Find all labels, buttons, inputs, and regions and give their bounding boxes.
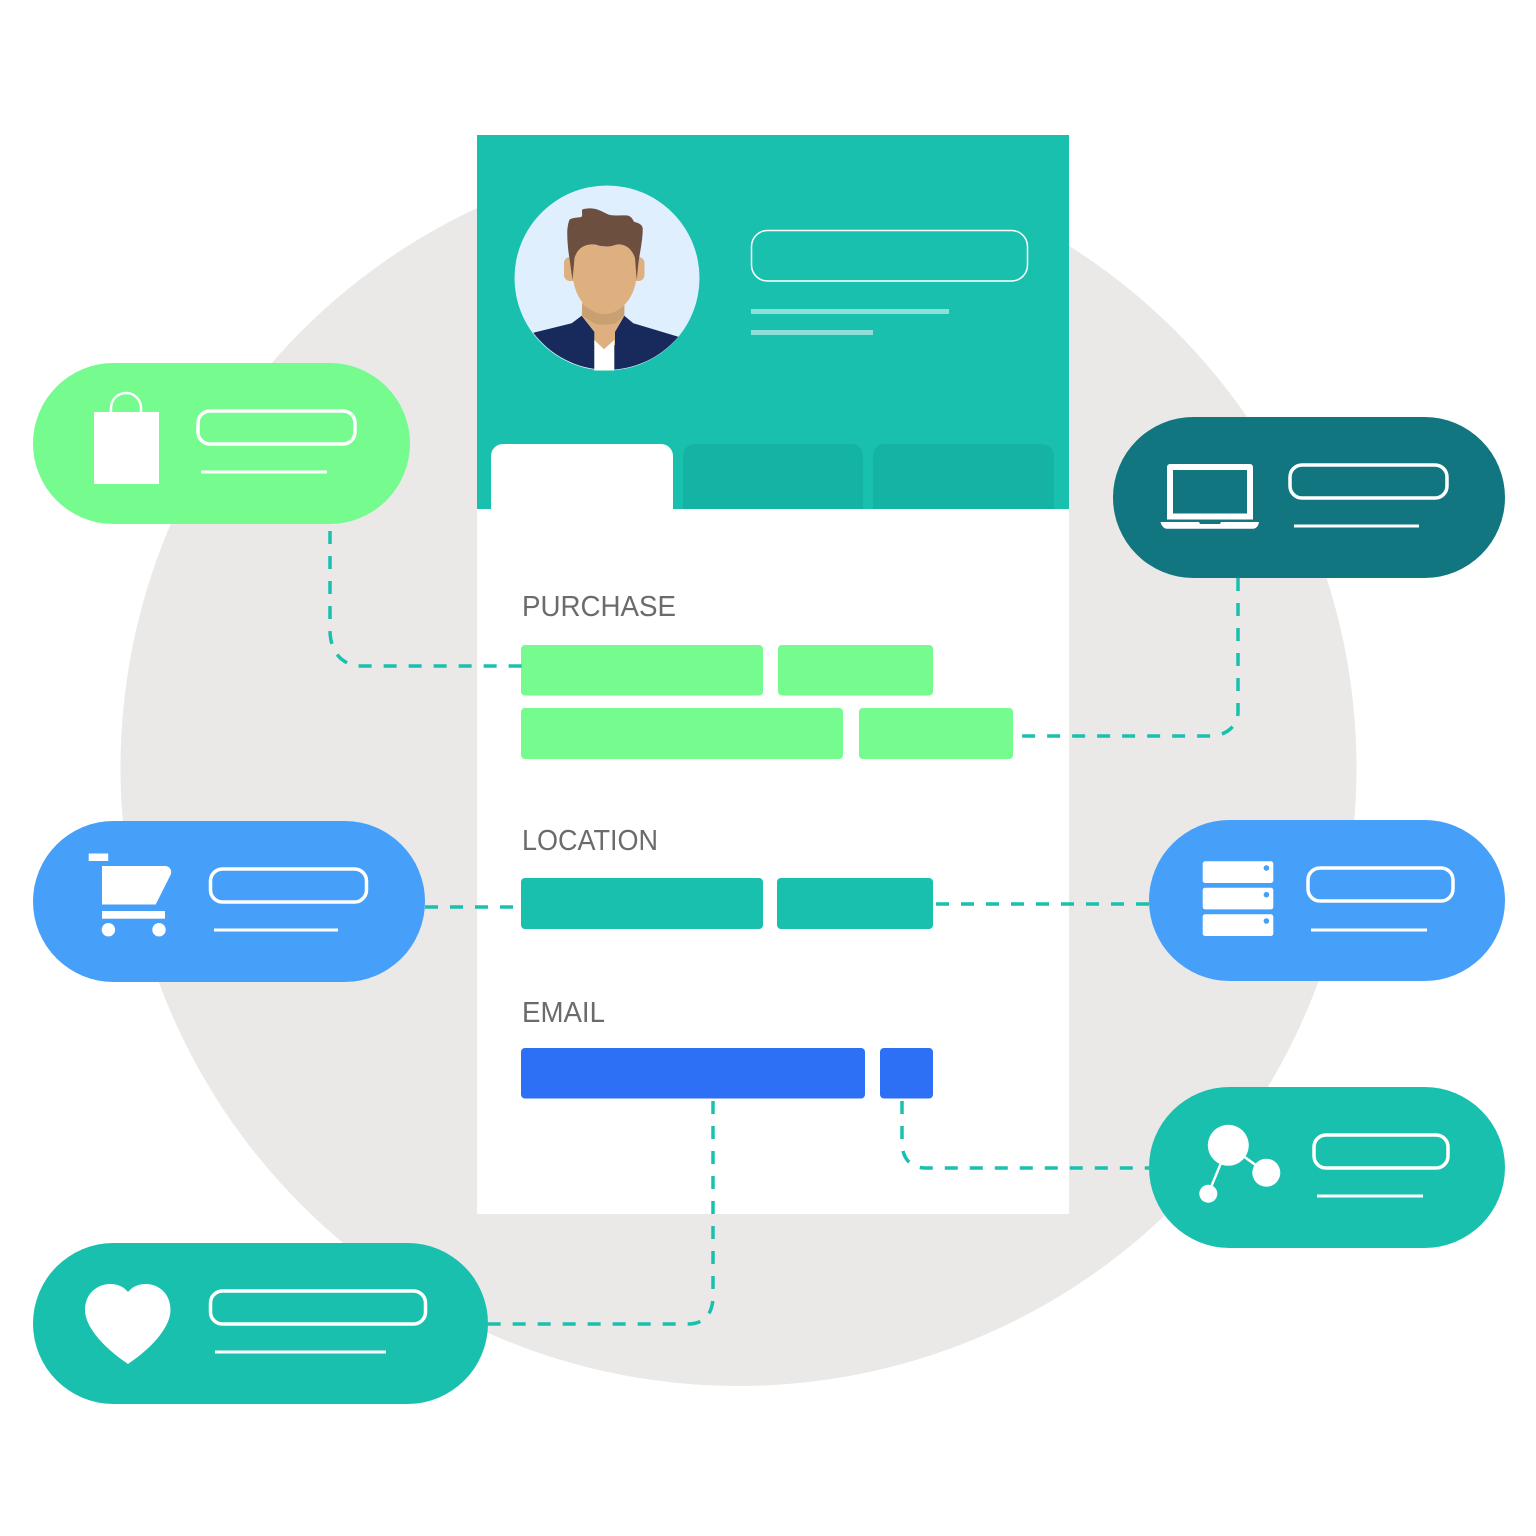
avatar xyxy=(514,186,700,370)
pill: server xyxy=(1149,820,1505,981)
subtitle line 1 xyxy=(751,309,949,314)
icon: cart xyxy=(89,854,171,936)
profile card xyxy=(477,135,1069,1214)
icon: shopping bag xyxy=(94,393,159,484)
field xyxy=(1308,868,1453,901)
heading: location: LOCATION xyxy=(522,825,658,857)
field xyxy=(210,869,366,902)
field xyxy=(210,1291,426,1324)
ears xyxy=(564,257,578,281)
connectors xyxy=(330,531,1238,1324)
line xyxy=(1317,1194,1423,1198)
location tags xyxy=(521,878,933,929)
name field xyxy=(752,230,1028,281)
email tags xyxy=(521,1048,933,1098)
pill: heart xyxy=(33,1243,488,1404)
purchase tags xyxy=(521,645,1013,759)
line xyxy=(214,928,338,932)
field xyxy=(1290,465,1447,498)
subtitle line 2 xyxy=(751,330,873,335)
line xyxy=(215,1350,386,1354)
heading: email: EMAIL xyxy=(522,997,605,1029)
neck shadow xyxy=(582,304,624,325)
neck xyxy=(582,298,624,349)
card header xyxy=(477,135,1069,510)
shirt xyxy=(594,340,614,370)
jacket xyxy=(533,316,678,370)
face xyxy=(573,244,637,314)
tab: inactive 2 xyxy=(873,444,1054,509)
icon: server xyxy=(1203,861,1273,936)
pill: network xyxy=(1149,1087,1505,1248)
background circle xyxy=(120,150,1356,1386)
card body xyxy=(477,135,1069,1214)
icon: heart xyxy=(85,1284,170,1364)
icon: network xyxy=(1199,1125,1280,1203)
pill: laptop xyxy=(1113,417,1505,578)
line xyxy=(201,470,327,474)
icon: laptop xyxy=(1160,464,1259,529)
pill: cart xyxy=(33,821,425,982)
tab: inactive 1 xyxy=(683,444,863,509)
tab: active xyxy=(491,444,673,510)
heading: purchase: PURCHASE xyxy=(522,591,676,623)
line xyxy=(1294,524,1419,528)
field xyxy=(1314,1135,1448,1168)
field xyxy=(198,411,355,444)
line xyxy=(1311,928,1427,932)
hair xyxy=(567,208,643,280)
pill: shopping bag xyxy=(33,363,410,524)
